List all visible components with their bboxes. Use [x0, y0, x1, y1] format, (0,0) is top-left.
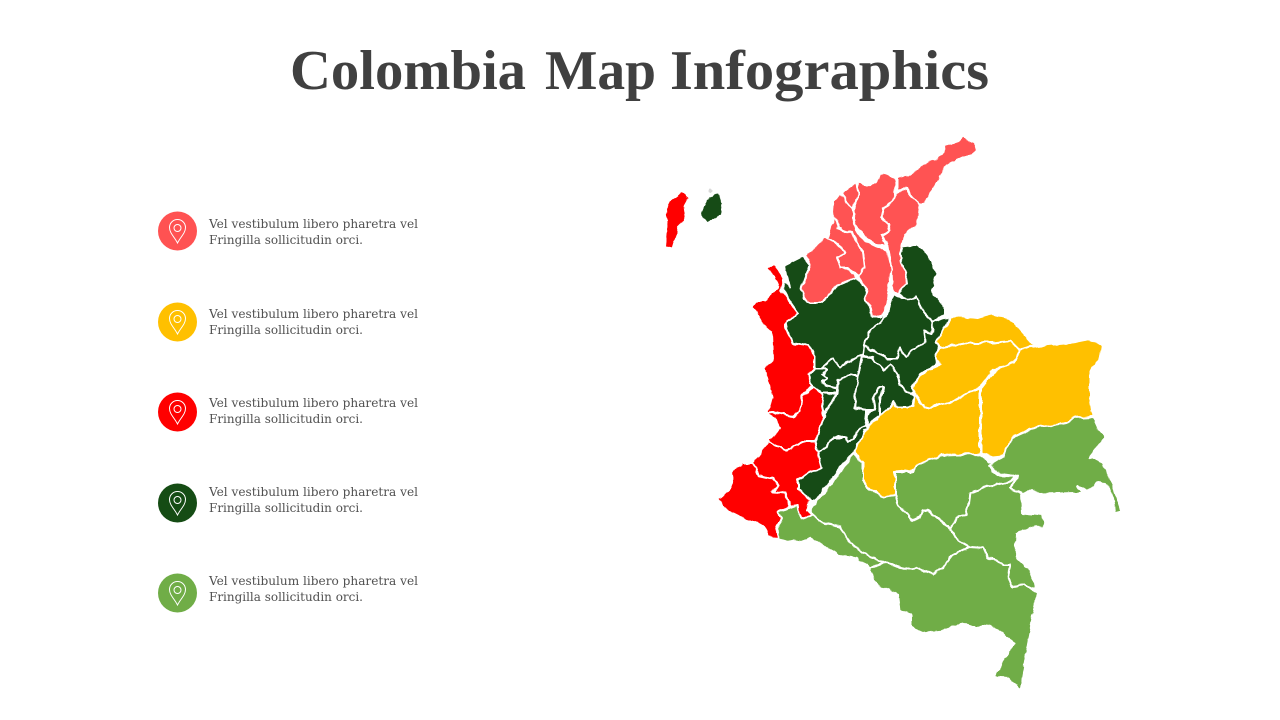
legend item: dark green: Fringilla sollicitudin orci. [209, 500, 363, 515]
legend item: green [158, 573, 418, 612]
legend item: light red: Vel vestibulum libero pharetra vel [208, 216, 418, 231]
legend item: light red [158, 212, 418, 250]
legend item: green: Fringilla sollicitudin orci. [209, 589, 363, 604]
title [290, 40, 989, 102]
title: Colombia [290, 40, 526, 102]
legend item: dark green: Vel vestibulum libero pharetra vel [208, 484, 418, 499]
title: Infographics [670, 40, 989, 102]
legend item: light red: Fringilla sollicitudin orci. [209, 232, 363, 247]
legend item: red [158, 392, 418, 432]
legend item: yellow: Fringilla sollicitudin orci. [209, 322, 363, 337]
region group: light red (Caribbean) [801, 136, 977, 317]
region group: red (Pacific) [717, 264, 825, 538]
legend item: yellow: Vel vestibulum libero pharetra vel [208, 306, 418, 321]
legend item: yellow [158, 302, 418, 342]
region group: green (Amazonía) [777, 417, 1122, 691]
map of Colombia [666, 136, 1122, 691]
legend item: dark green [158, 484, 418, 522]
legend item: green: Vel vestibulum libero pharetra vel [208, 573, 418, 588]
title: Map [545, 40, 656, 102]
legend list [158, 212, 418, 612]
islands [666, 188, 723, 248]
legend item: red: Vel vestibulum libero pharetra vel [208, 395, 418, 410]
region group: dark green (Andes) [782, 245, 950, 500]
region group: yellow (Orinoquía) [855, 314, 1102, 497]
legend item: red: Fringilla sollicitudin orci. [209, 411, 363, 426]
